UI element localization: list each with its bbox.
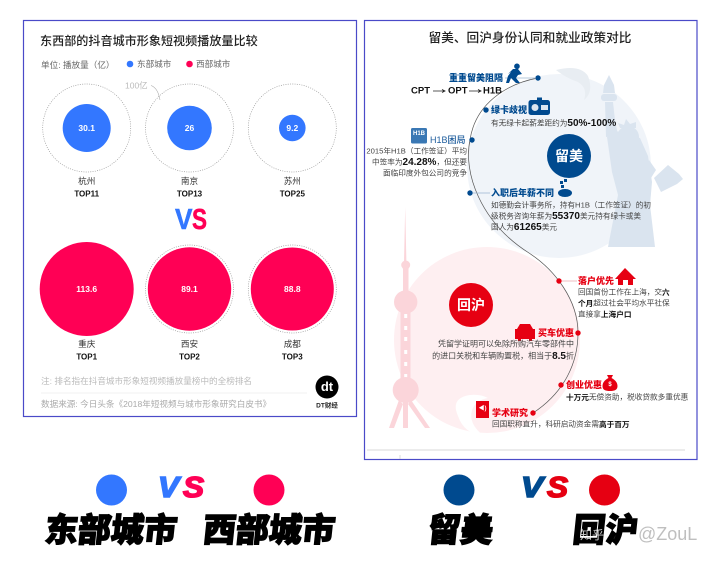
watermark	[580, 524, 697, 544]
legend: 东部城市	[137, 58, 172, 69]
city: Nanjing	[146, 84, 234, 198]
city: Hangzhou: 杭州	[78, 175, 95, 186]
logo: DT	[316, 376, 338, 410]
icon: runner	[506, 64, 522, 83]
legend: 西部城市	[196, 58, 231, 69]
city: Hangzhou	[43, 84, 131, 198]
logo: DT: dt	[321, 379, 334, 394]
badge: study in US	[547, 134, 591, 178]
VS mark: V	[175, 204, 193, 236]
connecting curve	[468, 78, 578, 413]
path: CPT OPT H1B: CPT	[411, 86, 430, 96]
city: Chongqing: 重庆	[78, 338, 96, 349]
city: Chengdu	[248, 245, 336, 362]
city: Suzhou: 9.2	[286, 123, 298, 133]
city: Nanjing: 26	[185, 123, 194, 133]
badge: return to Shanghai: 回沪	[457, 297, 485, 313]
city: Xi'an: 89.1	[181, 284, 198, 294]
icon: piggy bank	[558, 179, 572, 197]
label: return to Shanghai: 回沪	[571, 513, 640, 549]
node: startup benefit	[558, 375, 689, 402]
icon: H1B badge: H1B	[413, 131, 426, 137]
path: CPT OPT H1B	[411, 86, 502, 96]
icon: money bag: $	[608, 382, 612, 388]
city: Hangzhou: TOP11	[74, 190, 100, 198]
watermark: @ZouL	[638, 524, 697, 544]
legend: US vs Shanghai	[426, 472, 640, 549]
legend: US vs Shanghai: S	[547, 472, 569, 504]
logo: DT: DT财经	[316, 400, 338, 410]
node: salary gap	[467, 179, 651, 232]
annotation: 100 billion reference: 100亿	[125, 80, 148, 90]
node: H1B dilemma	[366, 128, 475, 178]
city: Chongqing: TOP1	[76, 352, 98, 362]
node: hukou priority	[556, 268, 670, 318]
city: Suzhou: 苏州	[284, 175, 301, 186]
node: H1B dilemma: 中签率为24.28%，但还要	[372, 156, 467, 168]
city: Xi'an: TOP2	[179, 352, 200, 362]
label: study in US: 留美	[426, 513, 495, 549]
icon: car	[515, 324, 535, 341]
city: Chengdu: 88.8	[284, 284, 301, 294]
node: green card gap: 绿卡歧视	[491, 104, 527, 115]
city: Xi'an	[146, 245, 234, 362]
illustration: swirl clouds	[456, 68, 590, 436]
label: west cities: 西部城市	[201, 512, 337, 549]
unit label: 单位: 播放量（亿）	[41, 59, 115, 70]
node: salary gap: 级税务咨询年薪为55370美元持有绿卡或美	[491, 210, 641, 222]
label: east cities: 东部城市	[43, 512, 179, 549]
node: car purchase: 凭留学证明可以免除所购汽车零部件中	[438, 338, 574, 348]
node: academic research: 回国职称直升，科研启动资金需高于百万	[492, 418, 630, 428]
node: academic research	[476, 401, 630, 428]
badge: study in US: 留美	[555, 148, 583, 164]
VS mark	[175, 204, 207, 236]
legend: US vs Shanghai: V	[521, 472, 546, 504]
legend: east vs west: V	[158, 472, 182, 504]
node: salary gap: 国人为61265美元	[491, 222, 557, 232]
illustration: statue of liberty	[601, 75, 683, 247]
city: Xi'an: 西安	[181, 338, 198, 349]
node: salary gap: 入职后年薪不同	[491, 187, 554, 198]
legend: east vs west: S	[183, 472, 205, 504]
icon: id card	[528, 98, 550, 115]
city: Chongqing	[40, 242, 134, 362]
heading: policy comparison: 留美、回沪身份认同和就业政策对比	[428, 30, 632, 45]
node: salary gap: 如德勤会计事务所，持有H1B（工作签证）的初	[491, 200, 651, 210]
node: visa barriers	[411, 64, 541, 96]
node: car purchase: 买车优惠	[538, 327, 574, 338]
legend: east vs west	[43, 472, 337, 549]
city: Chengdu: TOP3	[282, 352, 303, 362]
city: Suzhou: TOP25	[280, 190, 305, 198]
footnote: 注: 排名指在抖音城市形象短视频播放量榜中的全榜排名	[41, 375, 252, 386]
badge: return to Shanghai	[449, 283, 493, 327]
node: hukou priority: 回国首份工作在上海，交六	[578, 286, 670, 296]
background: light blue circle	[467, 74, 651, 258]
icon: house	[615, 268, 636, 285]
city: Nanjing: 南京	[181, 175, 198, 186]
background: pink circle	[394, 247, 580, 433]
node: H1B dilemma: 2015年H1B（工作签证）平均	[366, 146, 467, 156]
annotation: 100 billion reference	[125, 80, 160, 100]
VS mark: S	[192, 204, 207, 236]
panel: east vs west cities	[24, 20, 356, 416]
city: Nanjing: TOP13	[177, 190, 203, 198]
panel: study abroad vs Shanghai return	[364, 20, 697, 460]
city: Suzhou	[248, 84, 336, 198]
node: H1B dilemma: 面临印度外包公司的竞争	[383, 168, 467, 178]
node: green card gap	[483, 98, 616, 128]
node: startup benefit: 创业优惠	[566, 379, 602, 390]
city: Chengdu: 成都	[284, 338, 301, 349]
legend	[127, 58, 231, 69]
city: Hangzhou: 30.1	[78, 123, 95, 133]
node: green card gap: 有无绿卡起薪差距约为50%-100%	[491, 118, 616, 128]
illustration: Oriental Pearl Tower	[389, 207, 430, 428]
icon: academic badge	[476, 401, 489, 418]
node: academic research: 学术研究	[492, 407, 528, 418]
path: CPT OPT H1B: OPT	[448, 86, 468, 96]
node: startup benefit: 十万元无偿资助，税收贷款多重优惠	[566, 392, 689, 402]
icon: academic badge: ◀)	[478, 405, 487, 412]
node: hukou priority: 直接拿上海户口	[578, 308, 631, 318]
watermark: 知乎	[580, 528, 604, 542]
data source: 数据来源: 今日头条《2018年短视频与城市形象研究白皮书》	[41, 398, 271, 409]
node: hukou priority: 落户优先	[578, 275, 614, 286]
node: car purchase	[432, 324, 581, 362]
node: visa barriers: 重重留美阻隔	[449, 72, 503, 83]
city: Chongqing: 113.6	[76, 284, 97, 294]
heading: east west comparison: 东西部的抖音城市形象短视频播放量比较	[40, 33, 258, 48]
node: H1B dilemma: H1B困局	[430, 135, 466, 145]
node: hukou priority: 个月超过社会平均水平社保	[578, 298, 670, 308]
path: CPT OPT H1B: H1B	[483, 86, 502, 96]
node: car purchase: 的进口关税和车辆购置税，相当于8.5折	[432, 350, 574, 362]
